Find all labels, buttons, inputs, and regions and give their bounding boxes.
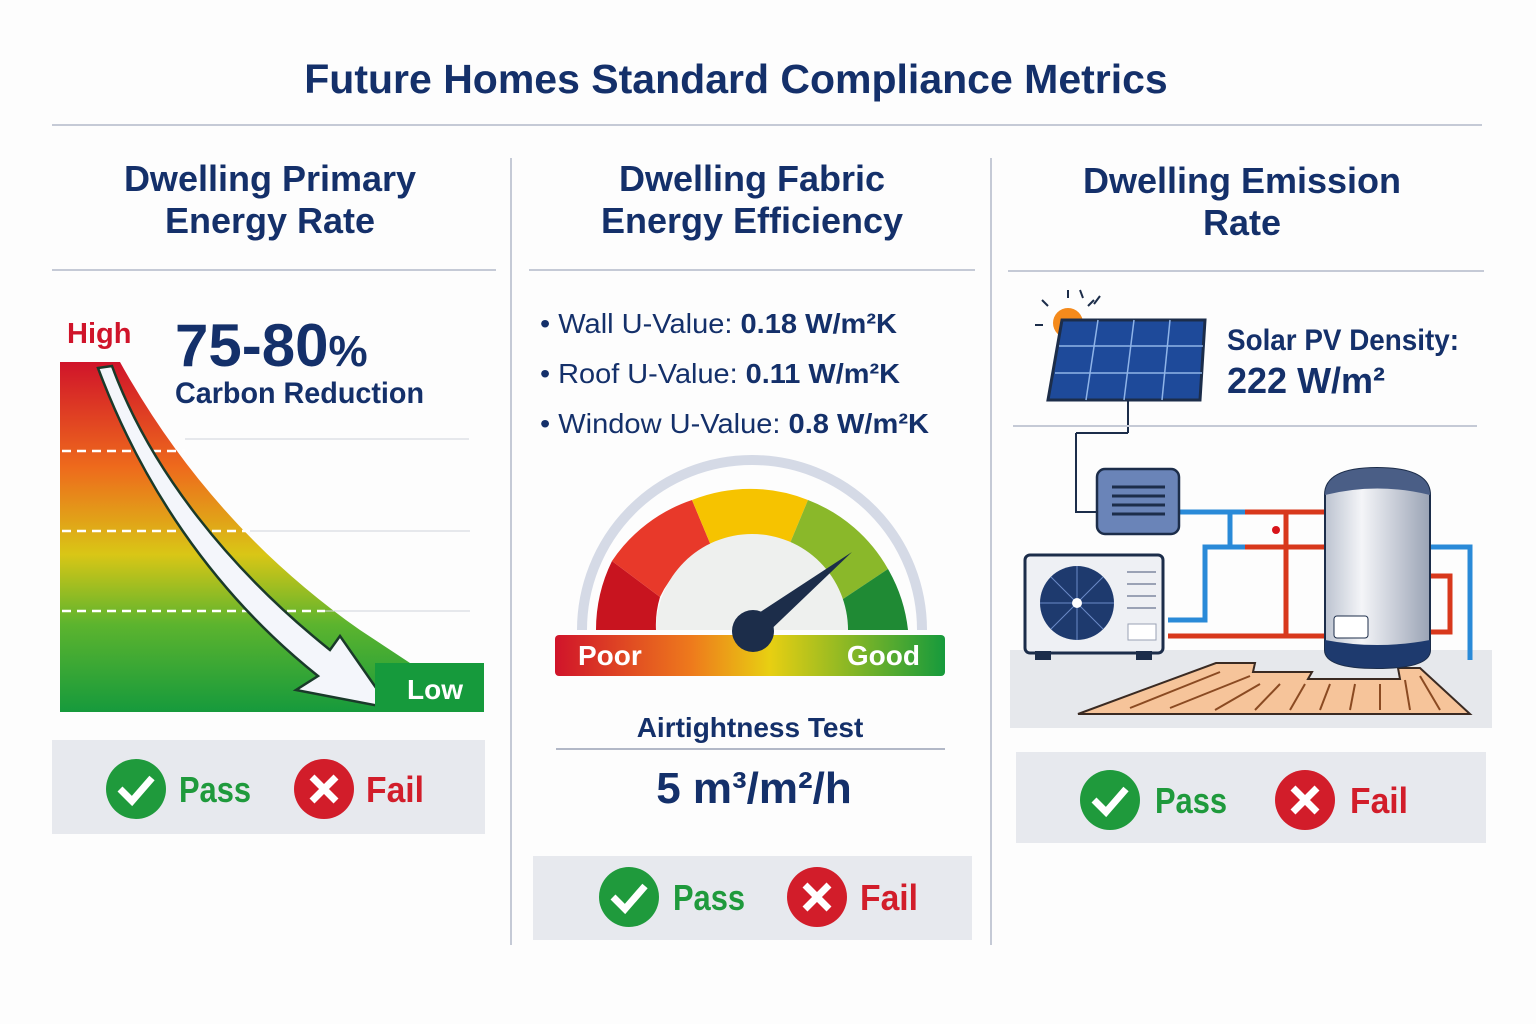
airtightness: Airtightness Test [637, 712, 863, 743]
bullet list u-values: • Wall U-Value: 0.18 W/m²K [540, 308, 897, 339]
chart: carbon reduction curve [60, 312, 484, 712]
heading: primary energy: Dwelling Primary [124, 158, 416, 199]
airtightness [556, 712, 945, 813]
pass/fail box 1: Pass [179, 769, 251, 810]
pass/fail box 3: Pass [1155, 780, 1227, 821]
solar pv density text: Solar PV Density: [1227, 324, 1459, 357]
airtightness: 5 m³/m²/h [656, 764, 852, 813]
heading: fabric: Energy Efficiency [601, 200, 903, 241]
heading: fabric: Dwelling Fabric [619, 158, 885, 199]
heading: emission: Rate [1203, 202, 1281, 243]
solar pv density text: 222 W/m² [1227, 360, 1385, 401]
panel: emission rate [1008, 160, 1492, 843]
bullet list u-values [540, 308, 929, 439]
pass/fail box 2: Fail [860, 877, 918, 918]
illustration: heat pump system [1010, 433, 1492, 728]
bullet list u-values: • Roof U-Value: 0.11 W/m²K [540, 358, 900, 389]
pass/fail box 3: Fail [1350, 780, 1408, 821]
heading: emission: Dwelling Emission [1083, 160, 1401, 201]
pass/fail box 3 [1016, 752, 1486, 843]
pass/fail box 2: Pass [673, 877, 745, 918]
chart: carbon reduction curve: Low [407, 674, 463, 705]
gauge: Poor [578, 640, 642, 671]
chart: carbon reduction curve: High [67, 318, 131, 350]
title: Future Homes Standard Compliance Metrics [304, 56, 1168, 102]
gauge: Good [847, 640, 920, 671]
pass/fail box 1: Fail [366, 769, 424, 810]
chart: carbon reduction curve: Carbon Reduction [175, 377, 424, 410]
pass/fail box 2 [533, 856, 972, 940]
bullet list u-values: • Window U-Value: 0.8 W/m²K [540, 408, 929, 439]
panel: fabric efficiency [529, 158, 975, 940]
panel: primary energy rate [52, 158, 496, 834]
heading: primary energy: Energy Rate [165, 200, 375, 241]
chart: carbon reduction curve: 75-80% [175, 312, 368, 379]
pass/fail box 1 [52, 740, 485, 834]
icon: solar panel [1035, 290, 1205, 433]
gauge [555, 460, 945, 676]
